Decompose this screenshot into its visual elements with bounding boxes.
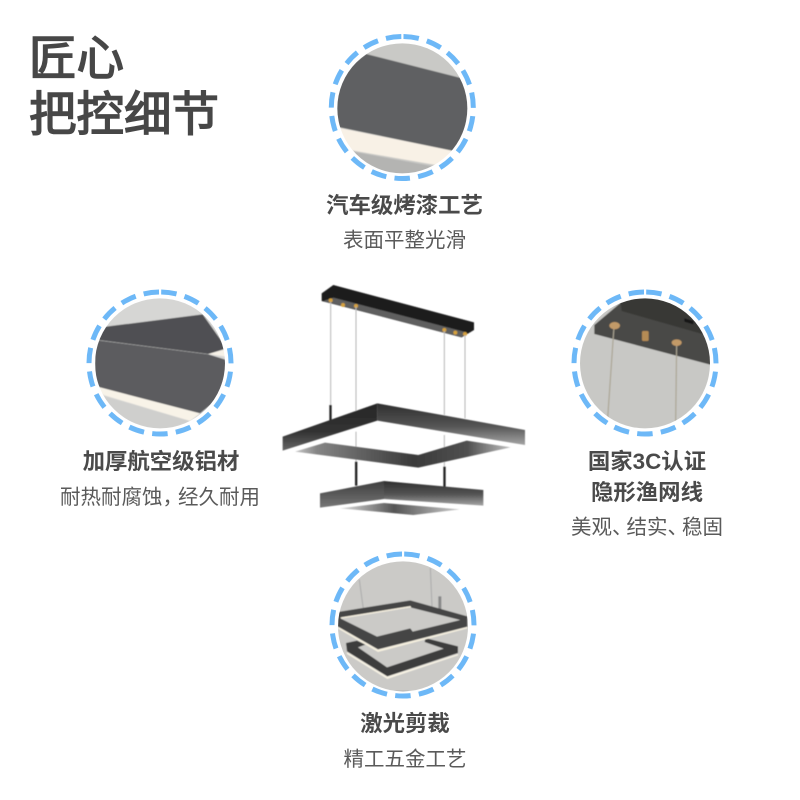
upper frame xyxy=(338,600,467,649)
lower frame xyxy=(346,638,458,676)
heading: 国家3C认证 xyxy=(588,448,706,474)
description: 表面平整光滑 xyxy=(343,229,466,252)
description: 耐热耐腐蚀，经久耐用 xyxy=(60,486,260,509)
ceiling canopy xyxy=(322,285,474,337)
dashed ring xyxy=(574,292,716,434)
heading: 激光剪裁 xyxy=(360,711,450,736)
panel: top detail, car-grade paint xyxy=(326,36,483,252)
infographic canvas xyxy=(30,34,722,768)
panel: left detail, aluminium xyxy=(60,292,260,509)
description: 精工五金工艺 xyxy=(344,748,466,771)
panel: bottom detail, laser cutting xyxy=(332,554,474,771)
description: 美观、结实、稳固 xyxy=(571,516,723,539)
suspension wires xyxy=(331,302,465,468)
icon: laser cut frames xyxy=(335,560,472,695)
dashed ring xyxy=(89,292,231,434)
title: 匠心 xyxy=(29,33,124,86)
heading: 加厚航空级铝材 xyxy=(83,449,239,474)
icon: aluminium profile close-up xyxy=(93,297,227,432)
heading: 汽车级烤漆工艺 xyxy=(326,193,483,218)
large square ring xyxy=(283,403,525,468)
panel: right detail, safety wire xyxy=(571,292,723,539)
title: 把控细节 xyxy=(29,89,219,142)
small square ring xyxy=(320,481,483,515)
dashed ring xyxy=(332,554,474,696)
wire sleeves xyxy=(329,405,446,487)
icon: paint finish close-up xyxy=(337,43,468,174)
pendant lamp illustration xyxy=(283,285,525,515)
heading second line: 隐形渔网线 xyxy=(591,480,703,505)
dashed ring xyxy=(331,36,473,178)
icon: hanging wire close-up xyxy=(578,297,712,430)
title xyxy=(29,33,219,142)
